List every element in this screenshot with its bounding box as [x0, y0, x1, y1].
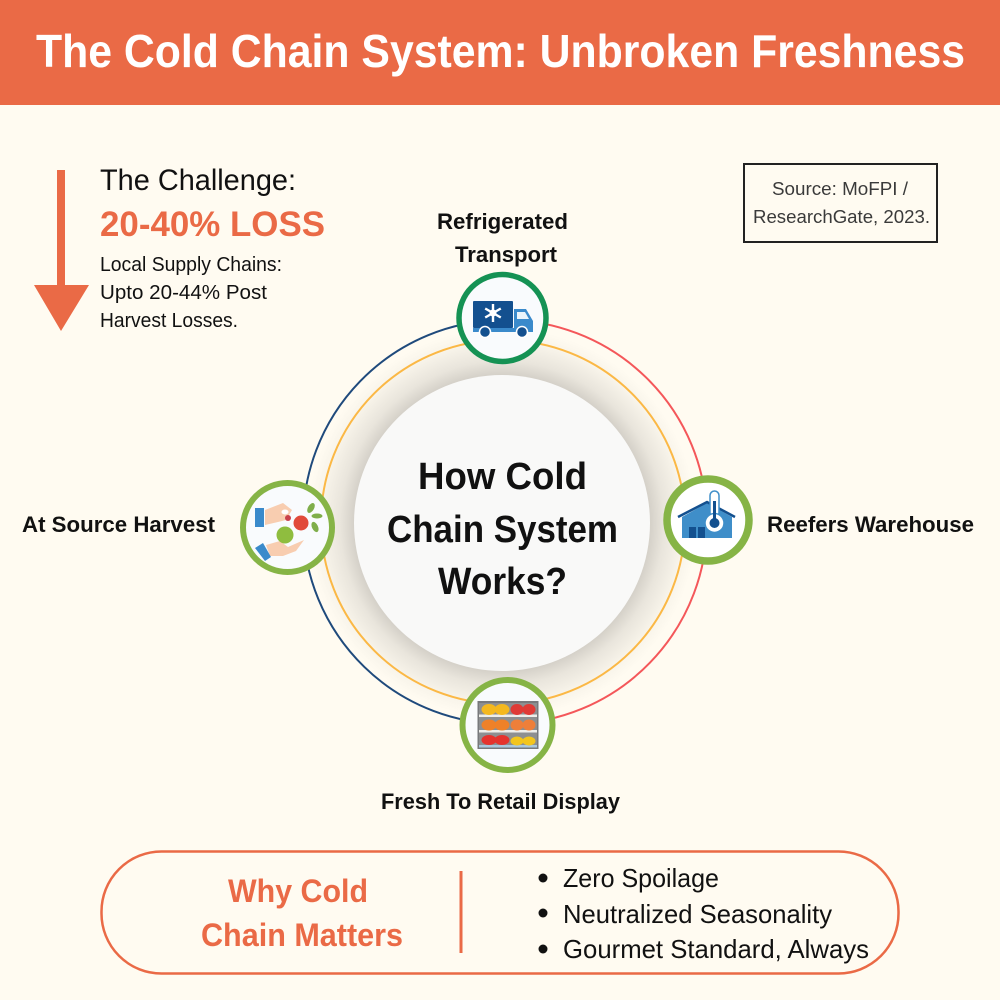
- text block: the challenge: The Challenge:: [100, 164, 296, 197]
- node: refrigerated transport: Refrigerated: [437, 209, 568, 234]
- node: at source harvest: [22, 483, 332, 572]
- text block: the challenge: [100, 164, 325, 332]
- panel heading: Chain Matters: [201, 917, 403, 953]
- node: reefers warehouse: [667, 479, 974, 561]
- center text: How Cold: [418, 456, 587, 498]
- icon: warehouse thermometer: [678, 491, 735, 538]
- node: reefers warehouse: Reefers Warehouse: [767, 512, 974, 537]
- center shadow: [307, 328, 697, 718]
- source box: Source: MoFPI /: [772, 179, 908, 199]
- arrow: down loss: [34, 170, 89, 331]
- text block: the challenge: Upto 20-44% Post: [100, 282, 267, 304]
- bullet list: Neutralized Seasonality: [563, 899, 832, 929]
- panel: why cold chain matters: [102, 852, 898, 974]
- bullet list: Zero Spoilage: [563, 863, 719, 893]
- cycle diagram: [303, 320, 707, 724]
- header banner: [0, 0, 1000, 105]
- panel heading: Why Cold: [228, 873, 368, 909]
- panel heading: [201, 873, 403, 953]
- text block: the challenge: Harvest Losses.: [100, 310, 238, 332]
- node: fresh to retail display: Fresh To Retail Display: [381, 789, 621, 814]
- node: refrigerated transport: [437, 209, 568, 362]
- icon: hands with apple: [255, 502, 322, 561]
- outer ring right red: [502, 320, 707, 724]
- center text: Works?: [438, 561, 567, 603]
- bullet list: Gourmet Standard, Always: [563, 934, 869, 964]
- icon: produce shelves: [478, 701, 538, 749]
- center text: Chain System: [387, 509, 618, 551]
- node: at source harvest: At Source Harvest: [22, 512, 216, 537]
- source box: [744, 164, 937, 242]
- text block: the challenge: Local Supply Chains:: [100, 254, 282, 276]
- center text: [387, 456, 618, 603]
- inner ring orange: [321, 340, 685, 704]
- text block: the challenge: 20-40% LOSS: [100, 205, 325, 244]
- node: fresh to retail display: [381, 680, 621, 814]
- center circle: [354, 375, 650, 671]
- source box: ResearchGate, 2023.: [753, 207, 930, 227]
- node: refrigerated transport: Transport: [455, 242, 558, 267]
- icon: truck: [473, 301, 533, 338]
- outer ring left navy: [303, 320, 508, 724]
- bullet list: [538, 863, 869, 964]
